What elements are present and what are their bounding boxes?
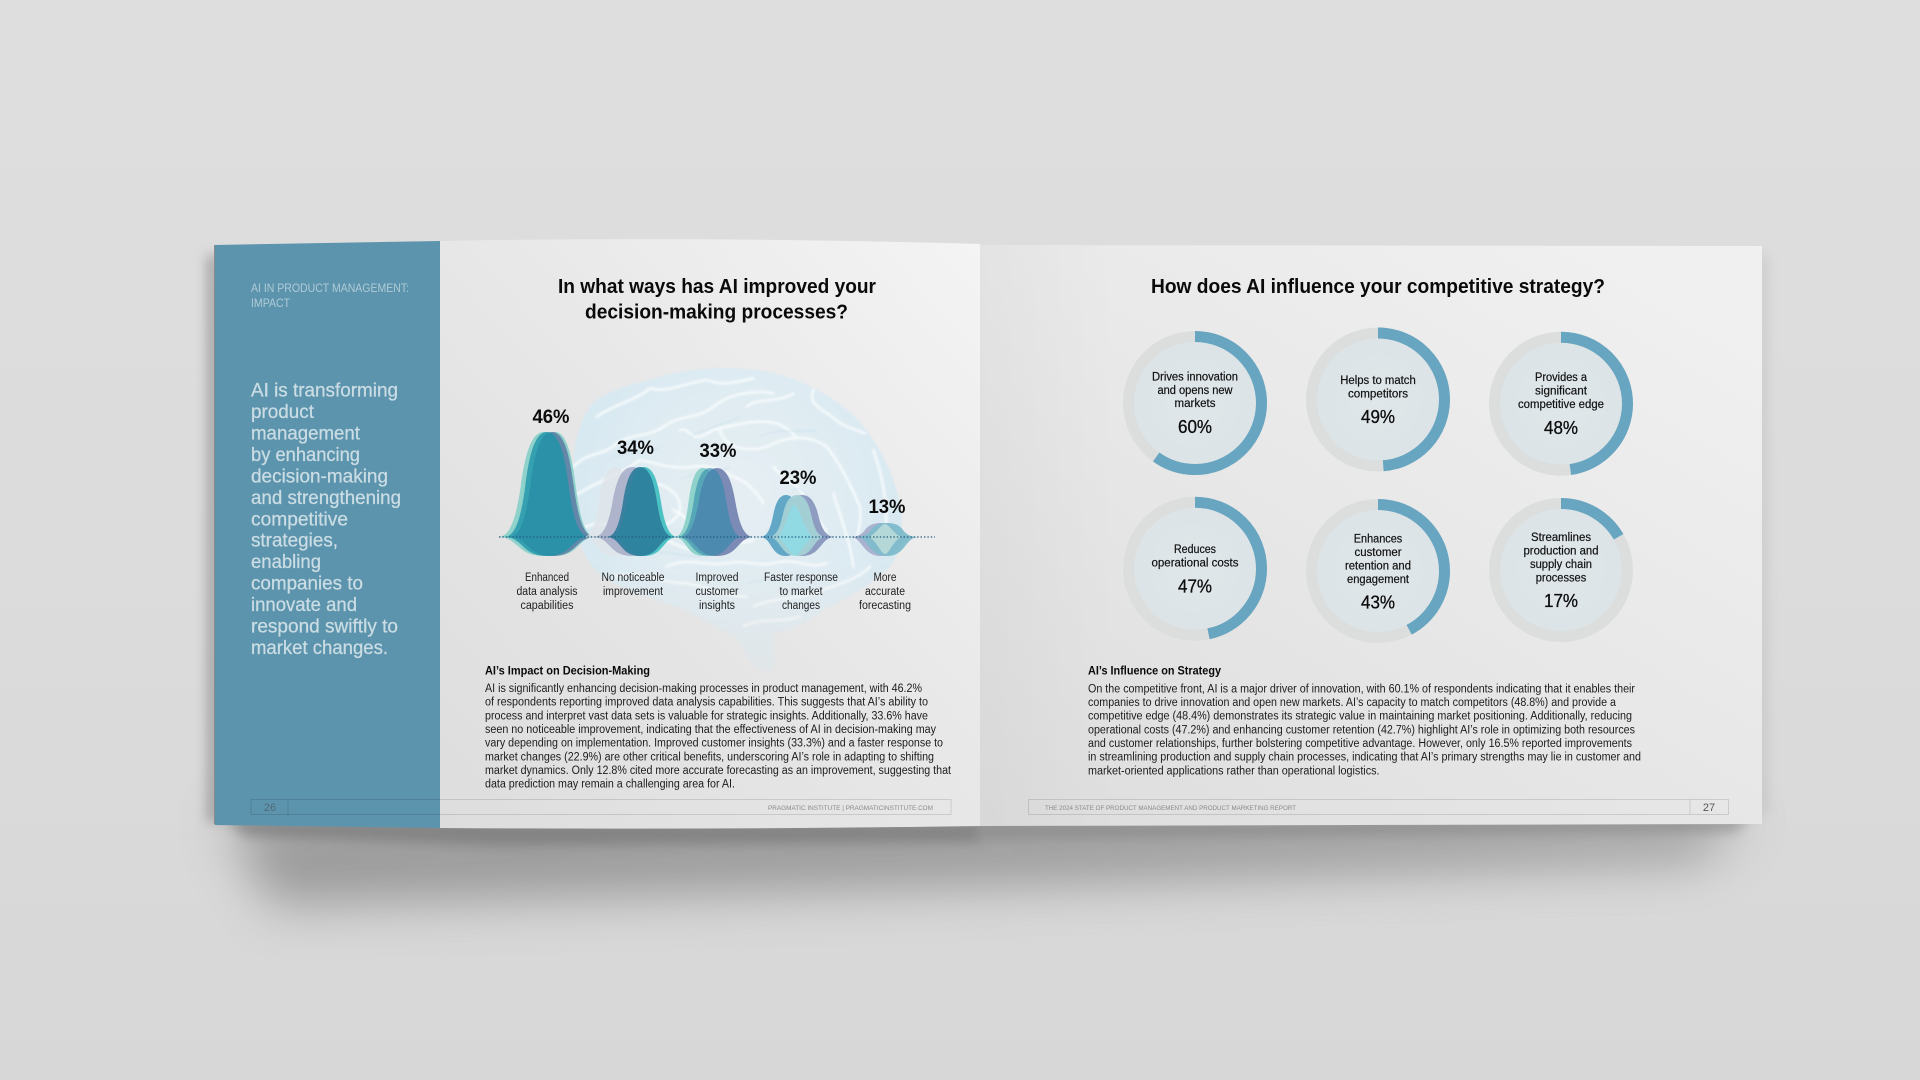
sidebar section label: AI IN PRODUCT MANAGEMENT: (251, 283, 409, 295)
text block: influence on strategy: market-oriented applications rather than operational logistics. (1088, 765, 1380, 777)
title: right page: How does AI influence your competitive strategy? (1151, 275, 1605, 298)
category labels: accurate (865, 586, 905, 598)
donut: drives innovation 60%: and opens new (1158, 385, 1233, 397)
category labels: Enhanced (525, 572, 569, 584)
donut: streamlines production 17%: Streamlines (1531, 532, 1591, 544)
bell: faster response to market changes 23% (760, 495, 835, 556)
page number 26: 26 (264, 802, 276, 814)
text block: influence on strategy: competitive edge (48.4%) demonstrates its strategic value in maintaining market positioning. Additionally, reducing (1088, 711, 1632, 723)
sidebar statement: AI is transforming (251, 381, 398, 402)
percentage labels: 33% (700, 441, 737, 462)
text block: impact on decision-making: of respondents reporting improved data analysis capabilities. This suggests that AI’s ability to (485, 697, 928, 709)
donut: customer retention 43%: customer (1354, 547, 1402, 559)
sidebar statement: management (251, 424, 361, 444)
panel: left page (440, 239, 980, 829)
sidebar statement: and strengthening (251, 488, 401, 509)
bell: more accurate forecasting 13% (849, 523, 919, 556)
text block: influence on strategy (1088, 666, 1641, 777)
category labels: customer (696, 586, 739, 598)
sidebar statement: market changes. (251, 638, 388, 659)
book shadow (207, 255, 1766, 905)
category labels: Improved (696, 572, 738, 584)
text block: impact on decision-making: AI is significantly enhancing decision-making processes in product management, with 46.2% (485, 683, 922, 695)
chart: bell curves (498, 407, 935, 612)
text block: impact on decision-making (485, 666, 952, 791)
panel: right page (980, 245, 1762, 826)
donut: customer retention 43%: Enhances (1354, 533, 1402, 545)
text block: impact on decision-making: data prediction may remain a challenging area for AI. (485, 779, 735, 791)
donut: drives innovation 60%: Drives innovation (1152, 371, 1238, 383)
bell: no noticeable improvement 34% (583, 467, 678, 556)
donut: reduces operational costs 47%: operational costs (1152, 557, 1239, 569)
publisher line: PRAGMATIC INSTITUTE | PRAGMATICINSTITUTE.COM (768, 805, 933, 812)
text block: impact on decision-making: vary depending on implementation. Improved customer insights (33.3%) and a faster response to (485, 738, 943, 750)
donut grid (1128, 333, 1628, 638)
footer: left page (251, 800, 951, 814)
donut: reduces operational costs 47%: 47% (1178, 577, 1212, 597)
category labels: capabilities (520, 600, 574, 612)
donut: helps to match competitors 49%: competitors (1348, 388, 1408, 400)
donut: streamlines production 17%: processes (1536, 572, 1586, 584)
donut: reduces operational costs 47%: Reduces (1174, 544, 1216, 556)
donut: customer retention 43%: engagement (1347, 574, 1410, 586)
report name: THE 2024 STATE OF PRODUCT MANAGEMENT AND PRODUCT MARKETING REPORT (1045, 805, 1296, 812)
sidebar statement: strategies, (251, 531, 338, 552)
text block: influence on strategy: operational costs (47.2%) and enhancing customer retention (42.7%) highlight AI’s role in optimizing both resources (1088, 724, 1635, 736)
donut: helps to match competitors 49%: Helps to match (1340, 375, 1416, 387)
category labels: insights (699, 600, 735, 612)
donut: helps to match competitors 49%: 49% (1361, 407, 1395, 427)
category labels: No noticeable (602, 572, 664, 584)
left book edge (214, 245, 216, 825)
donut: customer retention 43%: 43% (1361, 593, 1395, 613)
brain illustration (572, 368, 902, 628)
panel: blue sidebar (215, 241, 440, 828)
donut: significant competitive edge 48%: competitive edge (1518, 399, 1604, 411)
donut: significant competitive edge 48% (1494, 337, 1628, 470)
donut: drives innovation 60%: 60% (1178, 417, 1212, 437)
chart baseline (499, 536, 935, 538)
category labels: forecasting (859, 600, 911, 612)
title: left page (558, 275, 876, 324)
text block: influence on strategy: On the competitive front, AI is a major driver of innovation, with 60.1% of respondents indicating that it enables their (1088, 683, 1635, 695)
donut: streamlines production 17% (1494, 504, 1628, 636)
sidebar statement (251, 381, 401, 659)
percentage labels: 34% (617, 438, 654, 459)
donut: streamlines production 17%: production and (1524, 545, 1598, 557)
category labels: improvement (603, 586, 664, 598)
sidebar statement: innovate and (251, 595, 357, 616)
sidebar statement: enabling (251, 552, 321, 573)
percentage labels: 23% (780, 468, 817, 489)
donut: significant competitive edge 48%: Provides a (1535, 372, 1588, 384)
percentage labels (532, 407, 906, 518)
category labels (516, 572, 911, 612)
text block: influence on strategy: and customer relationships, further bolstering competitive advantage. However, only 16.5% reported improvements (1088, 738, 1632, 750)
sidebar statement: competitive (251, 509, 348, 530)
title: left page: In what ways has AI improved your (558, 275, 876, 298)
brain folds (573, 378, 886, 627)
sidebar section label: IMPACT (251, 298, 290, 310)
donut: drives innovation 60% (1128, 336, 1262, 470)
donut: streamlines production 17%: supply chain (1530, 559, 1592, 571)
category labels: to market (780, 586, 823, 598)
spine shading (980, 245, 1120, 826)
sidebar statement: respond swiftly to (251, 616, 398, 638)
percentage labels: 46% (532, 407, 570, 428)
sidebar statement: companies to (251, 574, 363, 595)
sidebar statement: by enhancing (251, 445, 360, 466)
donut: significant competitive edge 48%: significant (1535, 386, 1588, 398)
bell: improved customer insights 33% (674, 468, 754, 556)
category labels: More (874, 572, 896, 584)
text block: impact on decision-making: seen no noticeable improvement, indicating that the effectiveness of AI in decision-making may (485, 724, 936, 736)
text block: impact on decision-making: market dynamics. Only 12.8% cited more accurate forecasting as an improvement, suggesting that (485, 765, 952, 777)
donut: streamlines production 17%: 17% (1544, 591, 1578, 611)
brain shading (682, 422, 815, 496)
title: left page: decision-making processes? (585, 300, 848, 324)
donut: significant competitive edge 48%: 48% (1544, 418, 1578, 438)
page number 27: 27 (1703, 802, 1715, 814)
text block: impact on decision-making: AI’s Impact on Decision-Making (485, 666, 650, 678)
text block: impact on decision-making: process and interpret vast data sets is valuable for strategic insights. Additionally, 33.6% have (485, 710, 928, 722)
text block: influence on strategy: in streamlining production and supply chain processes, indicating that AI’s primary strengths may lie in customer and (1088, 752, 1641, 764)
donut: customer retention 43% (1312, 504, 1444, 638)
donut: customer retention 43%: retention and (1345, 560, 1411, 572)
text block: impact on decision-making: market changes (22.9%) are other critical benefits, underscoring AI’s role in adapting to shifting (485, 751, 934, 763)
category labels: data analysis (516, 586, 578, 598)
sidebar statement: product (251, 402, 315, 423)
text block: influence on strategy: companies to drive innovation and open new markets. AI’s capacity to match competitors (48.8%) and provide a (1088, 697, 1617, 709)
donut: reduces operational costs 47% (1128, 502, 1262, 635)
text block: influence on strategy: AI’s Influence on Strategy (1088, 666, 1222, 678)
category labels: changes (782, 600, 820, 612)
donut: helps to match competitors 49% (1312, 333, 1444, 466)
footer: right page (1028, 800, 1728, 814)
sidebar statement: decision-making (251, 466, 388, 487)
category labels: Faster response (764, 572, 838, 584)
sidebar section label (251, 283, 409, 310)
donut: drives innovation 60%: markets (1174, 398, 1216, 410)
percentage labels: 13% (868, 497, 906, 518)
bell: enhanced data analysis 46% (498, 432, 596, 556)
